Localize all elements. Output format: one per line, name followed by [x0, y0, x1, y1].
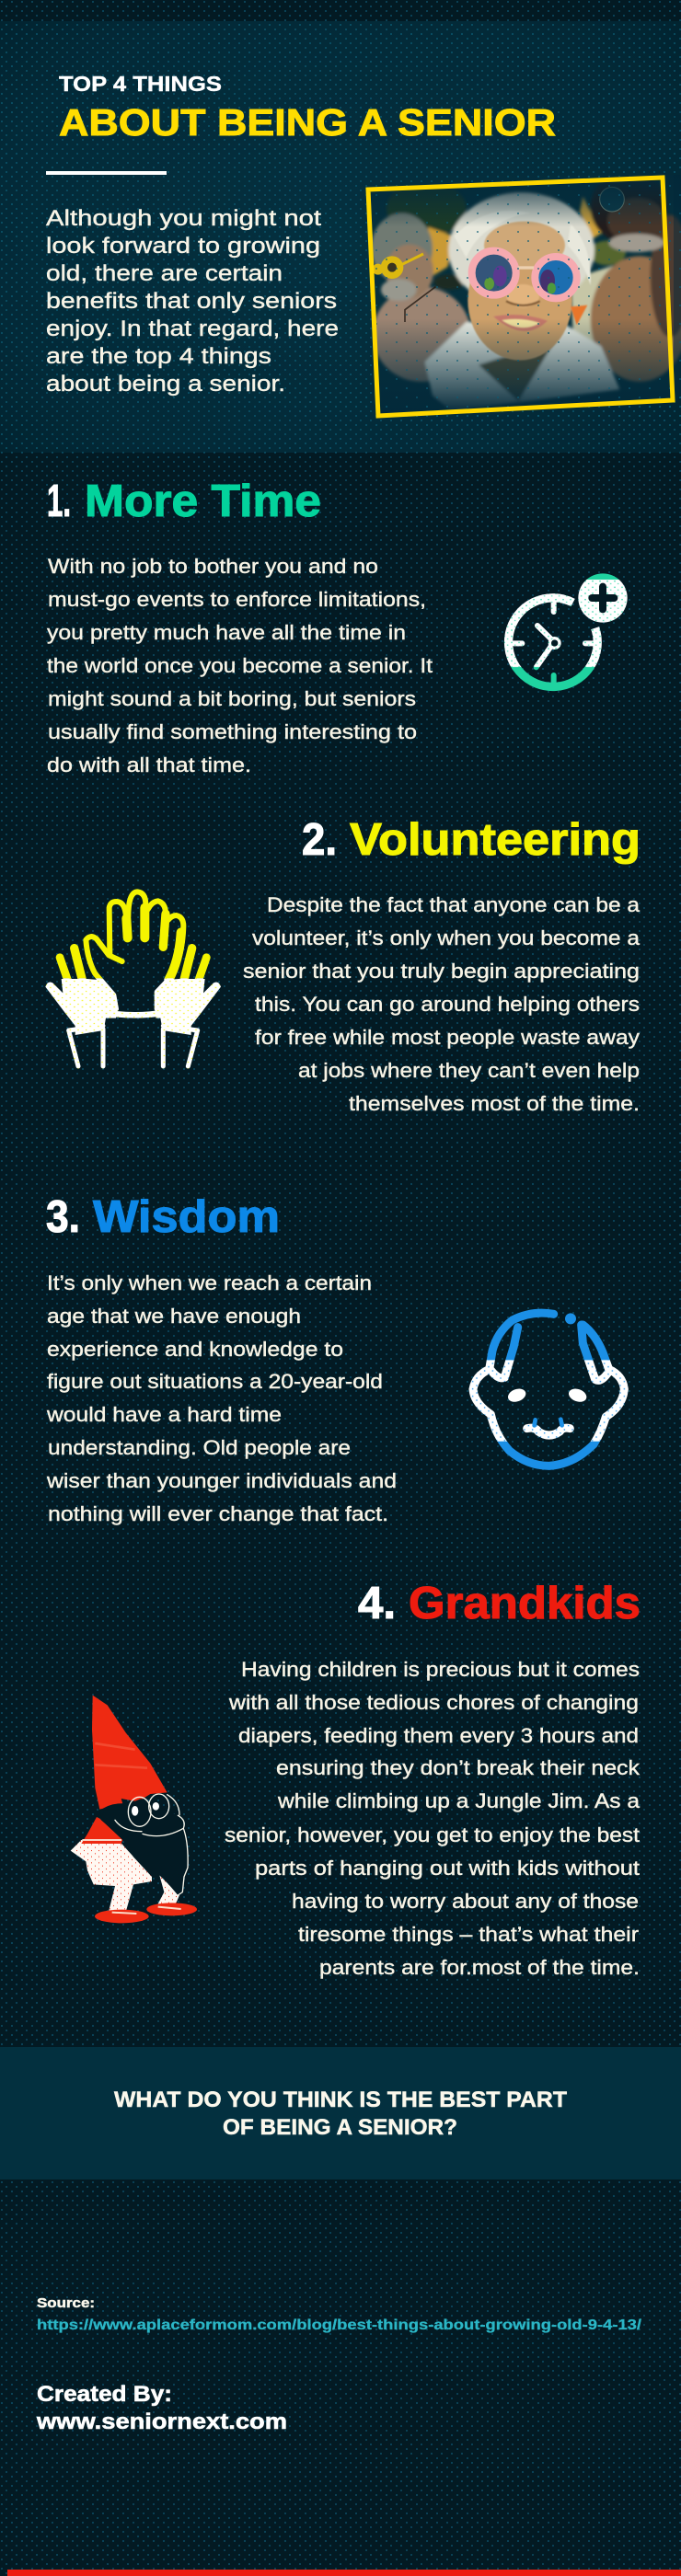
body text: volunteering: Despite the fact that anyone can be a: [267, 893, 641, 916]
gnome body: [71, 1840, 152, 1912]
body text: volunteering: [243, 893, 641, 1115]
icon: clock with plus: [509, 573, 628, 686]
credit: Created By:: [37, 2382, 172, 2407]
body text: wisdom: nothing will ever change that fact.: [48, 1502, 388, 1525]
closing question: [114, 2087, 567, 2140]
body text: more time: you pretty much have all the time in: [47, 621, 406, 644]
credit: [36, 2382, 287, 2434]
title: top 4 things: TOP 4 THINGS: [59, 72, 222, 96]
heading: wisdom: 3.: [46, 1192, 80, 1242]
body text: volunteering: at jobs where they can’t even help: [298, 1059, 640, 1082]
gnome hat: [92, 1696, 167, 1810]
woman: [425, 322, 619, 411]
body text: grandkids: while climbing up a Jungle Jim. As a: [277, 1789, 641, 1812]
body text: more time: must-go events to enforce limitations,: [48, 588, 426, 611]
heading: more time: More Time: [85, 477, 321, 526]
gnome face and beard: [99, 1799, 189, 1895]
icon: raised hands: [45, 891, 221, 1066]
body text: wisdom: [46, 1271, 397, 1525]
body text: wisdom: It’s only when we reach a certain: [47, 1271, 372, 1294]
body text: more time: do with all that time.: [47, 753, 251, 776]
heading: wisdom: Wisdom: [93, 1192, 280, 1242]
body text: more time: With no job to bother you and no: [48, 555, 378, 578]
intro text: Although you might not: [46, 206, 321, 231]
body text: grandkids: Having children is precious but it comes: [241, 1658, 640, 1681]
source: Source:: [37, 2295, 95, 2311]
heading: volunteering: Volunteering: [350, 815, 641, 865]
body text: wisdom: age that we have enough: [47, 1305, 301, 1328]
section 2: volunteering: [45, 815, 641, 1115]
photo: smiling seniors in round glasses: [359, 170, 681, 423]
credit: www.seniornext.com: [36, 2409, 287, 2434]
yellow flower glasses: [373, 254, 423, 275]
body text: grandkids: having to worry about any of those: [292, 1890, 639, 1913]
body text: volunteering: themselves most of the time.: [349, 1092, 640, 1115]
body text: volunteering: for free while most people waste away: [255, 1026, 640, 1049]
closing question: OF BEING A SENIOR?: [223, 2115, 457, 2140]
left hand: [45, 949, 116, 1066]
title: top 4 things: [59, 72, 556, 144]
section 4: grandkids: [71, 1579, 641, 1979]
divider rule: [46, 171, 167, 175]
intro text: [46, 206, 339, 397]
panel: closing question band: [0, 2047, 681, 2179]
body text: wisdom: understanding. Old people are: [48, 1436, 351, 1459]
closing question: WHAT DO YOU THINK IS THE BEST PART: [114, 2087, 567, 2112]
source: [37, 2295, 642, 2333]
footer red bar: [7, 2570, 681, 2576]
body text: wisdom: wiser than younger individuals and: [46, 1469, 397, 1492]
intro text: old, there are certain: [46, 261, 283, 286]
right man: [591, 256, 681, 382]
body text: grandkids: [225, 1658, 641, 1979]
heading: more time: 1.: [47, 477, 71, 526]
body text: more time: usually find something interesting to: [48, 720, 417, 743]
heading: grandkids: 4.: [358, 1579, 396, 1628]
round pink glasses: [472, 251, 577, 298]
right hand: [156, 949, 221, 1066]
source: https://www.aplaceformom.com/blog/best-things-about-growing-old-9-4-13/: [37, 2317, 642, 2333]
body text: volunteering: this. You can go around helping others: [255, 993, 640, 1016]
body text: volunteering: senior that you truly begin appreciating: [243, 960, 640, 983]
left man: [373, 287, 471, 382]
body text: grandkids: parents are for.most of the time.: [319, 1956, 640, 1979]
body text: more time: the world once you become a senior. It: [47, 654, 433, 677]
panel: hero: [0, 21, 681, 453]
body text: grandkids: tiresome things – that’s what their: [298, 1923, 639, 1946]
body text: more time: [47, 555, 433, 776]
heading: grandkids: Grandkids: [409, 1579, 641, 1628]
centre hand outline: [86, 891, 183, 1015]
intro text: look forward to growing: [46, 234, 320, 259]
body text: wisdom: figure out situations a 20-year-old: [47, 1370, 383, 1393]
section 3: wisdom: [46, 1192, 624, 1525]
intro text: are the top 4 things: [46, 344, 271, 369]
heading: volunteering: 2.: [302, 815, 337, 865]
photo frame: [368, 178, 673, 416]
section 1: more time: [47, 477, 628, 776]
body text: volunteering: volunteer, it’s only when you become a: [252, 926, 641, 949]
body text: wisdom: experience and knowledge to: [47, 1338, 343, 1361]
body text: grandkids: parts of hanging out with kids without: [255, 1857, 640, 1880]
gnome feet: [95, 1910, 149, 1923]
body text: grandkids: senior, however, you get to enjoy the best: [225, 1823, 640, 1846]
icon: gnome: [71, 1696, 197, 1923]
intro text: about being a senior.: [46, 372, 285, 397]
body text: more time: might sound a bit boring, but seniors: [48, 687, 416, 710]
body text: grandkids: diapers, feeding them every 3 hours and: [238, 1724, 639, 1747]
intro text: enjoy. In that regard, here: [46, 316, 339, 341]
body text: wisdom: would have a hard time: [46, 1403, 282, 1426]
body text: grandkids: ensuring they don’t break their neck: [276, 1756, 641, 1779]
body text: grandkids: with all those tedious chores of changing: [228, 1691, 639, 1714]
intro text: benefits that only seniors: [46, 289, 337, 314]
icon: old person's face: [473, 1313, 624, 1466]
title: top 4 things: ABOUT BEING A SENIOR: [59, 101, 556, 144]
